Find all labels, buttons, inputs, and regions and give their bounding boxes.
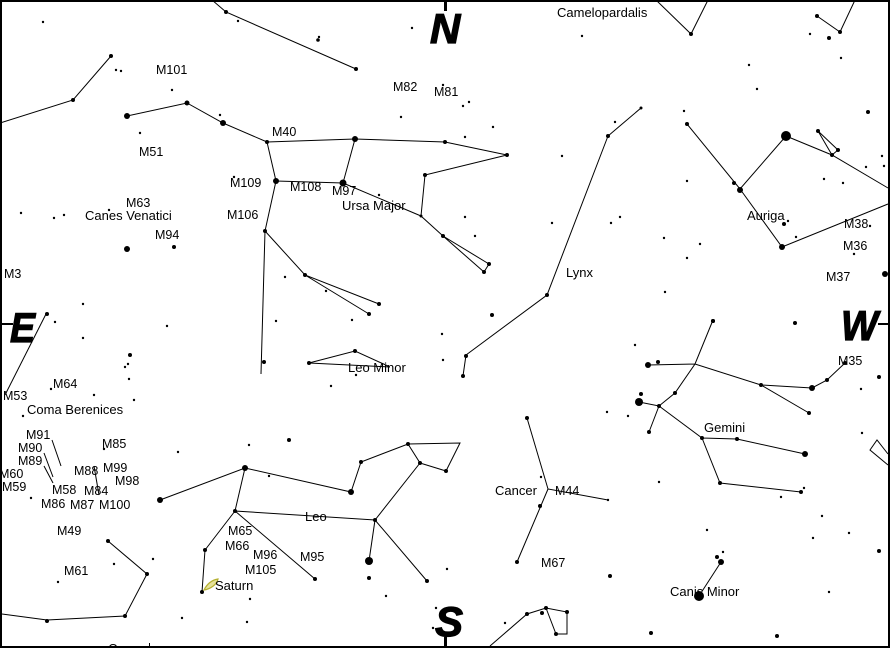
labels: constellation names: Saturn <box>215 578 253 593</box>
labels: constellation names: Coma Berenices <box>27 402 124 417</box>
constellation: Cancer <box>515 416 609 564</box>
constellation: Coma Berenices <box>5 314 46 395</box>
labels: Messier objects: M85 <box>102 437 126 451</box>
labels: Messier objects: M66 <box>225 539 249 553</box>
labels: Messier objects: M100 <box>99 498 130 512</box>
labels: Messier objects: M109 <box>230 176 261 190</box>
labels: Messier objects <box>0 63 868 578</box>
labels: Messier objects: M36 <box>843 239 867 253</box>
labels: constellation names: Lynx <box>566 265 593 280</box>
labels: constellation names: Camelopardalis <box>557 5 648 20</box>
labels: Messier objects: M105 <box>245 563 276 577</box>
compass: west: W <box>841 302 881 349</box>
constellation: Ursa Major <box>124 100 509 374</box>
labels: Messier objects: M64 <box>53 377 77 391</box>
constellation: Canis Minor <box>694 551 724 601</box>
labels: Messier objects: M38 <box>844 217 868 231</box>
labels: Messier objects: M91 <box>26 428 50 442</box>
labels: Messier objects: M3 <box>4 267 21 281</box>
labels: Messier objects: M67 <box>541 556 565 570</box>
labels: constellation names: Canis Minor <box>670 584 740 599</box>
labels: Messier objects: M108 <box>290 180 321 194</box>
labels: Messier objects: M97 <box>332 184 356 198</box>
labels: constellation names: Auriga <box>747 208 785 223</box>
labels: Messier objects: M44 <box>555 484 579 498</box>
labels: Messier objects: M96 <box>253 548 277 562</box>
constellation: Lynx <box>461 106 642 378</box>
labels: Messier objects: M86 <box>41 497 65 511</box>
labels: Messier objects: M49 <box>57 524 81 538</box>
compass: north: N <box>430 5 462 52</box>
constellation: Leo <box>157 442 460 594</box>
labels: Messier objects: M61 <box>64 564 88 578</box>
constellation: Leo Minor <box>307 349 390 367</box>
constellation: Virgo <box>2 539 149 623</box>
labels: Messier objects: M35 <box>838 354 862 368</box>
labels: constellation names: Cancer <box>495 483 538 498</box>
tick mark at bottom edge <box>149 643 150 646</box>
constellation: Camelopardalis <box>656 0 855 36</box>
compass: east: E <box>10 304 37 351</box>
labels: constellation names: Ursa Major <box>342 198 406 213</box>
labels: Messier objects: M95 <box>300 550 324 564</box>
labels: Messier objects: M51 <box>139 145 163 159</box>
constellation: Hydra head <box>490 606 569 646</box>
labels: Messier objects: M98 <box>115 474 139 488</box>
labels: Messier objects: M63 <box>126 196 150 210</box>
labels: Messier objects: M84 <box>84 484 108 498</box>
labels: Messier objects: M89 <box>18 454 42 468</box>
labels: Messier objects: M53 <box>3 389 27 403</box>
constellation: Orion edge <box>870 440 888 465</box>
constellation: Gemini <box>635 319 847 494</box>
labels: Messier objects: M94 <box>155 228 179 242</box>
labels: Messier objects: M81 <box>434 85 458 99</box>
labels: constellation names: Canes Venatici <box>85 208 172 223</box>
labels: Messier objects: M90 <box>18 441 42 455</box>
labels: Messier objects: M58 <box>52 483 76 497</box>
constellation: Auriga <box>685 122 888 250</box>
labels: Messier objects: M87 <box>70 498 94 512</box>
labels: Messier objects: M106 <box>227 208 258 222</box>
labels: constellation names: Leo <box>305 509 327 524</box>
constellation: Draco <box>0 0 358 123</box>
labels: Messier objects: M88 <box>74 464 98 478</box>
labels: Messier objects: M65 <box>228 524 252 538</box>
labels: Messier objects: M40 <box>272 125 296 139</box>
labels: Messier objects: M82 <box>393 80 417 94</box>
labels: Messier objects: M101 <box>156 63 187 77</box>
compass: south: S <box>435 598 463 645</box>
labels: constellation names: Gemini <box>704 420 745 435</box>
leader lines: Virgo cluster <box>44 440 99 495</box>
labels: Messier objects: M99 <box>103 461 127 475</box>
labels: Messier objects: M37 <box>826 270 850 284</box>
labels: Messier objects: M59 <box>2 480 26 494</box>
labels: constellation names: Leo Minor <box>348 360 406 375</box>
icon: Saturn <box>204 579 218 590</box>
